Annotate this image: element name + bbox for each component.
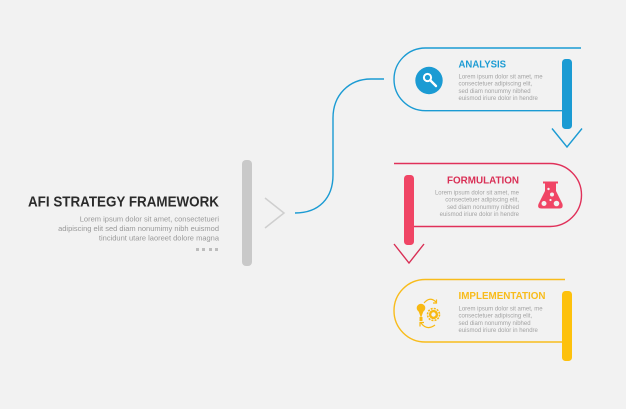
body text: sed diam nonummy nibhed	[458, 89, 531, 95]
body text: Lorem ipsum dolor sit amet, me	[458, 75, 543, 81]
icon: idea and gear cycle	[417, 299, 440, 328]
pagination dots	[196, 248, 218, 251]
title: AFI STRATEGY FRAMEWORK	[28, 194, 219, 210]
panel: framework intro	[28, 194, 220, 251]
body text: euismod iriure dolor in hendre	[458, 328, 539, 334]
vertical bar	[562, 291, 572, 361]
icon: magnifier	[415, 67, 443, 94]
card outline	[394, 164, 582, 226]
arrow: down chevron	[394, 244, 424, 263]
body text: sed diam nonummy nibhed	[458, 321, 531, 327]
heading: FORMULATION	[447, 176, 519, 186]
vertical grey bar	[242, 160, 252, 266]
body text: euismod iriure dolor in hendre	[458, 96, 539, 102]
body text: consectetuer adipiscing elit,	[458, 82, 533, 88]
body text: Lorem ipsum dolor sit amet, me	[435, 191, 520, 197]
body text: consectetuer adipiscing elit,	[445, 198, 519, 204]
vertical bar	[562, 59, 572, 129]
heading: ANALYSIS	[458, 60, 506, 70]
body text: consectetuer adipiscing elit,	[458, 314, 533, 320]
description text: Lorem ipsum dolor sit amet, consectetueri	[80, 214, 219, 224]
connector line	[295, 79, 384, 213]
heading: IMPLEMENTATION	[458, 291, 546, 302]
panel: analysis	[394, 48, 582, 147]
card outline	[394, 48, 581, 111]
vertical bar	[404, 175, 414, 245]
body text: euismod iriure dolor in hendre	[440, 212, 520, 218]
card outline	[394, 280, 565, 342]
panel: formulation	[394, 164, 582, 263]
panel: implementation	[394, 280, 572, 361]
body text: Lorem ipsum dolor sit amet, me	[458, 307, 543, 313]
arrow: grey chevron	[265, 198, 284, 228]
description text: tincidunt utare laoreet dolore magna	[99, 233, 220, 242]
body text: sed diam nonummy nibhed	[447, 205, 519, 211]
icon: flask	[538, 182, 563, 208]
description text: adipiscing elit sed diam nonumimy nibh euismod	[58, 224, 219, 233]
arrow: down chevron	[552, 128, 582, 147]
